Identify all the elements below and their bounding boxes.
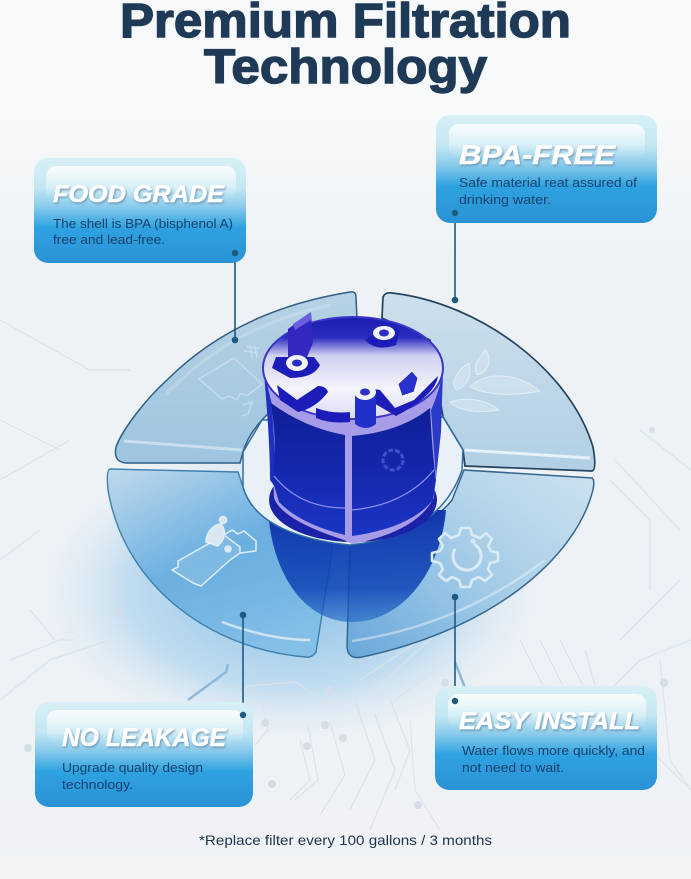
footnote: *Replace filter every 100 gallons / 3 months bbox=[199, 832, 492, 848]
glass collar ring bbox=[243, 417, 463, 545]
raised slots on top bbox=[272, 329, 438, 422]
tab on top bbox=[288, 312, 313, 357]
card text: technology. bbox=[62, 777, 133, 792]
right edge of cartridge bbox=[431, 372, 443, 478]
connector: easy install bbox=[452, 594, 458, 701]
card text: free and lead-free. bbox=[53, 232, 165, 247]
right body panel bbox=[352, 408, 436, 536]
card text: The shell is BPA (bisphenol A) bbox=[53, 216, 233, 231]
title: Technology bbox=[204, 41, 487, 94]
card text: Upgrade quality design bbox=[62, 760, 203, 775]
card text: Water flows more quickly, and bbox=[462, 743, 645, 758]
icon: filter cartridge bbox=[243, 312, 463, 545]
card heading: BPA-FREE bbox=[459, 140, 616, 170]
card text: drinking water. bbox=[459, 192, 551, 207]
icon: filter with water drops bbox=[172, 516, 256, 586]
panel: easy install disc segment bbox=[347, 470, 594, 658]
connector: no leakage bbox=[240, 612, 246, 715]
left body panel bbox=[271, 403, 345, 535]
blue circuit traces below disc bbox=[188, 662, 467, 700]
card: easy install bbox=[435, 686, 657, 790]
cartridge top face bbox=[263, 317, 443, 419]
card: no leakage bbox=[35, 702, 253, 807]
dark base ring bbox=[269, 458, 437, 542]
panel: no leakage disc segment bbox=[107, 469, 333, 657]
post on top bbox=[355, 392, 376, 428]
icon: leaves bbox=[450, 350, 540, 411]
card heading: NO LEAKAGE bbox=[62, 724, 227, 752]
icon: food grade cutlery and plate bbox=[199, 345, 262, 416]
background circuit nodes bbox=[24, 427, 668, 809]
dot on card bbox=[240, 712, 246, 718]
cartridge reflection seen through disc bbox=[268, 510, 446, 622]
dot on card bbox=[452, 698, 458, 704]
panel: bpa-free disc segment bbox=[382, 293, 595, 471]
card: bpa-free bbox=[436, 115, 657, 223]
icon: gear bbox=[432, 528, 498, 587]
panel: food grade disc segment bbox=[115, 292, 357, 463]
connector: bpa-free bbox=[452, 213, 458, 303]
card text: not need to wait. bbox=[462, 760, 564, 775]
card heading: FOOD GRADE bbox=[53, 181, 225, 208]
dot on card bbox=[232, 250, 238, 256]
card text: Safe material reat assured of bbox=[459, 175, 637, 190]
cartridge body bbox=[264, 370, 443, 544]
connector: food grade bbox=[232, 253, 238, 343]
dot on card bbox=[452, 210, 458, 216]
left edge stripe of cartridge bbox=[264, 372, 277, 490]
background circuit traces bbox=[0, 320, 691, 830]
title bbox=[120, 0, 571, 94]
background glow under disc bbox=[40, 440, 540, 740]
card: food grade bbox=[34, 158, 246, 263]
icon: embossed gear on cartridge bbox=[383, 450, 403, 470]
card heading: EASY INSTALL bbox=[459, 708, 640, 735]
